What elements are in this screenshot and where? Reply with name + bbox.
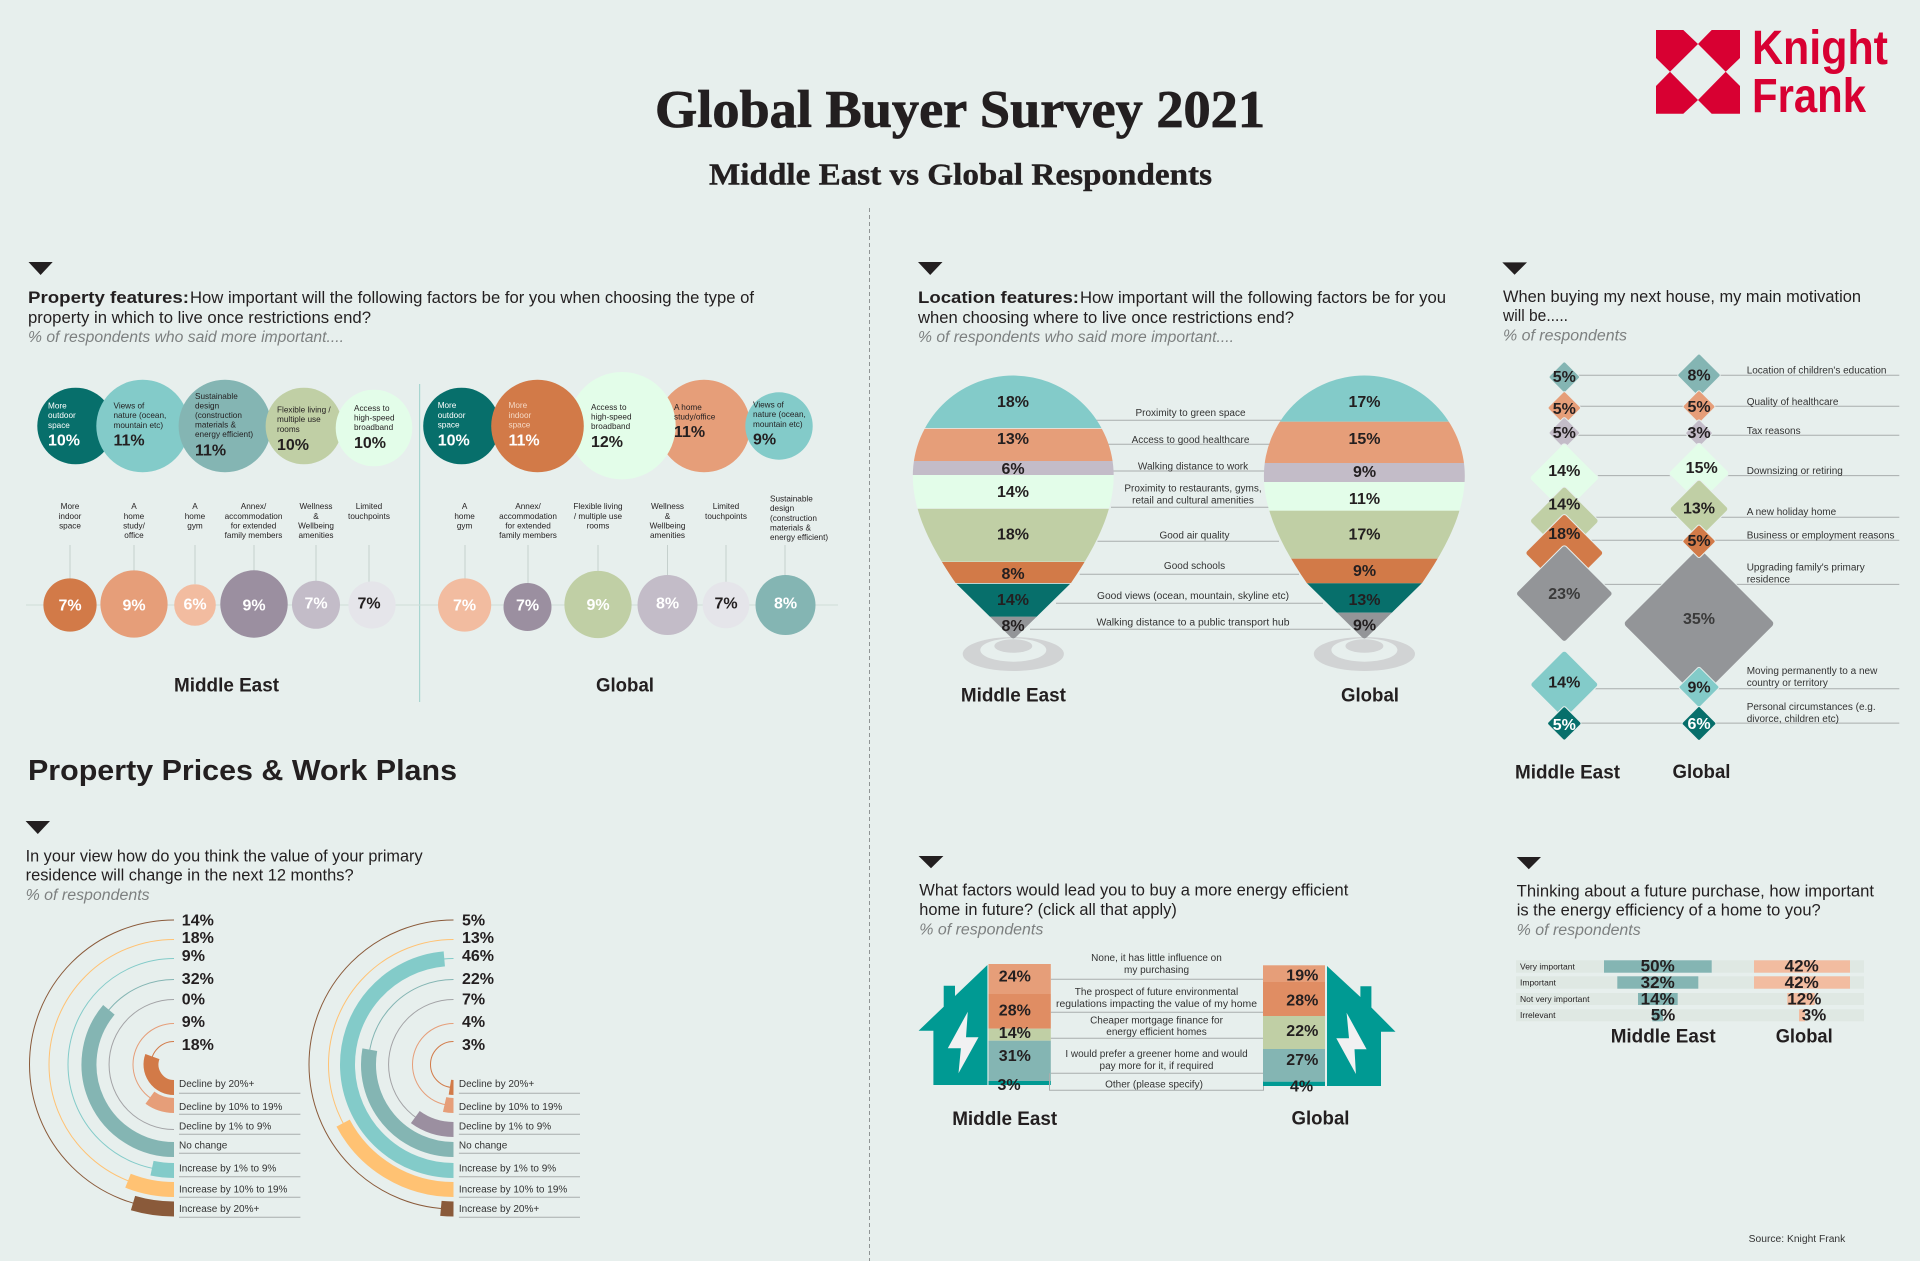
motivation labels: Personal circumstances (e.g.: [1747, 702, 1876, 713]
chart: Global more important: 9%: [753, 432, 776, 448]
chart: Middle East pin: 13%: [997, 431, 1029, 448]
chart: Global less important: 7%: [516, 598, 539, 614]
chart: Global less important: [438, 494, 828, 638]
chart: Middle East more important: nature (ocean,: [114, 411, 166, 420]
heading: location features: % of respondents who said more important....: [918, 329, 1234, 346]
chart: Middle East more important: 10%: [354, 435, 386, 452]
heading: property features: % of respondents who said more important....: [28, 329, 344, 346]
chart: Middle East pin: 18%: [997, 526, 1029, 544]
chart: Middle East less important: Annex/: [241, 502, 267, 511]
factor labels: None, it has little influence on: [1091, 953, 1222, 964]
chart: Middle East pin: 14%: [997, 484, 1029, 501]
chart: Global more important: nature (ocean,: [753, 410, 806, 419]
chart: Global less important: 7%: [714, 596, 738, 612]
chart: Middle East less important: Wellness: [299, 502, 333, 511]
chart: Global more important: Views of: [753, 400, 785, 410]
chart: importance bars: 12%: [1787, 990, 1821, 1008]
chart: Global pin: 11%: [1349, 491, 1380, 508]
chart: importance bars: 42%: [1785, 973, 1819, 992]
chart: Middle East more important: 10%: [277, 437, 309, 454]
chart: Global more important: mountain etc): [753, 420, 803, 429]
chart: Middle East less important: study/: [123, 522, 146, 530]
factor labels: pay more for it, if required: [1100, 1061, 1213, 1072]
label: Middle East: Middle East: [1515, 762, 1621, 784]
chart: Global stacked bar: 4%: [1290, 1078, 1313, 1096]
panel: energy efficient home factors: [919, 856, 1396, 1130]
chart: Middle East less important: 9%: [122, 598, 146, 614]
heading: main motivation: % of respondents: [1503, 327, 1627, 344]
icon: right house with lightning: [1327, 966, 1396, 1086]
chart: Middle East more important: materials &: [195, 420, 236, 430]
icon: section marker: [26, 821, 50, 834]
chart: Middle East diamonds: 23%: [1548, 586, 1580, 603]
motivation labels: Business or employment reasons: [1747, 530, 1895, 541]
label: Global: Global: [1776, 1026, 1833, 1048]
chart: Middle East more important: (construction: [195, 411, 242, 420]
chart: Global less important: Wellbeing: [650, 522, 686, 530]
chart: importance bars: Irrelevant: [1520, 1010, 1556, 1020]
heading: property features: property in which to live once restrictions end?: [28, 309, 371, 327]
chart: Global radial: 22%: [462, 971, 494, 988]
chart: importance bars: 5%: [1651, 1006, 1675, 1024]
chart: Global radial: [309, 912, 580, 1217]
chart: Middle East more important: Access to: [354, 404, 390, 413]
chart: Global less important: 9%: [586, 597, 610, 614]
panel: importance of energy efficiency: [1516, 857, 1874, 1048]
connector lines and factor labels: Access to good healthcare: [1132, 435, 1250, 446]
chart: Middle East radial: Decline by 20%+: [179, 1079, 254, 1090]
chart: Global more important: Access to: [591, 403, 627, 412]
chart: Global less important: Sustainable: [770, 494, 813, 504]
chart: Global diamonds: 5%: [1687, 399, 1711, 416]
chart: Middle East less important: for extended: [231, 522, 277, 530]
heading: property features: Property features:: [28, 289, 189, 307]
panel: location features: [905, 262, 1475, 706]
chart: Middle East less important: space: [59, 522, 81, 530]
motivation labels: residence: [1747, 575, 1790, 586]
chart: Middle East more important: Sustainable: [195, 392, 238, 401]
chart: Global diamonds: 13%: [1683, 500, 1715, 517]
chart: Global radial: No change: [459, 1140, 508, 1152]
connector lines and factor labels: Proximity to green space: [1135, 408, 1246, 419]
chart: Global radial: 46%: [462, 948, 494, 965]
chart: Middle East stacked bar: 3%: [998, 1077, 1021, 1094]
section heading: property prices and work plans: Property Prices & Work Plans: [28, 755, 457, 787]
chart: Middle East diamonds: 5%: [1553, 425, 1576, 442]
chart: Global less important: home: [454, 512, 475, 521]
chart: Global less important: / multiple use: [574, 512, 623, 521]
chart: Middle East more important: mountain etc): [114, 421, 163, 430]
chart: Global stacked bar: 22%: [1286, 1023, 1318, 1040]
chart: Global radial: 5%: [462, 912, 485, 930]
label: Middle East: Middle East: [1611, 1026, 1716, 1048]
factor labels: The prospect of future environmental: [1075, 987, 1238, 998]
chart: Middle East radial: 32%: [182, 971, 214, 988]
chart: Middle East less important: gym: [187, 522, 203, 530]
chart: Middle East radial: 14%: [182, 912, 214, 930]
chart: Global less important: accommodation: [499, 512, 557, 521]
motivation labels: Quality of healthcare: [1747, 397, 1839, 408]
chart: Global stacked bar: [1263, 965, 1325, 1096]
chart: Global more important: [423, 372, 813, 479]
connector lines and factor labels: Good views (ocean, mountain, skyline etc): [1097, 591, 1289, 602]
motivation labels: Downsizing or retiring: [1747, 466, 1843, 477]
chart: Global stacked bar: 19%: [1286, 968, 1318, 984]
chart: Global pin: 17%: [1348, 526, 1381, 544]
chart: Middle East stacked bar: 24%: [999, 968, 1031, 986]
chart: importance bars: [1516, 956, 1864, 1024]
chart: Middle East less important: More: [61, 502, 80, 511]
icon: section marker: [1502, 262, 1527, 275]
connector lines and factor labels: Good air quality: [1159, 530, 1230, 542]
chart: Middle East more important: 11%: [114, 432, 145, 450]
chart: Global more important: More: [508, 401, 528, 410]
chart: Middle East more important: space: [48, 421, 70, 430]
heading: energy factors: home in future? (click all that apply): [919, 901, 1177, 919]
motivation labels: country or territory: [1747, 678, 1828, 689]
chart: Global radial: Increase by 10% to 19%: [459, 1184, 567, 1196]
label: Middle East: Middle East: [961, 686, 1067, 706]
heading: property features: How important will the following factors be for you when choosing the type of: [190, 289, 754, 307]
icon: section marker: [1517, 857, 1541, 869]
chart: Middle East stacked bar: [988, 964, 1051, 1094]
chart: Middle East less important: 7%: [304, 596, 328, 612]
label: Middle East: Middle East: [952, 1109, 1058, 1130]
chart: Middle East less important: Limited: [356, 502, 383, 511]
chart: Middle East less important: Wellbeing: [298, 522, 334, 530]
heading: location features: How important will the following factors be for you: [1080, 289, 1446, 307]
connector lines and factor labels: Proximity to restaurants, gyms,: [1124, 484, 1262, 494]
icon: section marker: [28, 262, 53, 275]
heading: energy factors: What factors would lead you to buy a more energy efficient: [919, 882, 1349, 900]
factor labels: regulations impacting the value of my home: [1056, 999, 1257, 1010]
chart: Global pin: [1255, 375, 1475, 671]
icon: section marker: [918, 262, 942, 275]
chart: Global pin: 9%: [1353, 563, 1376, 580]
motivation labels: Moving permanently to a new: [1747, 666, 1878, 677]
chart: Global less important: touchpoints: [705, 512, 747, 521]
chart: Middle East pin: 14%: [997, 592, 1029, 609]
icon: left house with lightning: [919, 965, 987, 1085]
chart: Middle East less important: home: [185, 512, 206, 521]
chart: Global more important: broadband: [591, 422, 631, 431]
chart: Middle East more important: Views of: [114, 402, 145, 410]
panel: property features: [26, 262, 838, 702]
chart: Global more important: 11%: [508, 432, 540, 450]
chart: importance bars: 42%: [1785, 956, 1819, 976]
chart: Middle East radial: [30, 912, 300, 1217]
motivation labels: divorce, children etc): [1747, 714, 1839, 725]
chart: importance bars: 14%: [1641, 990, 1675, 1008]
chart: importance bars: Very important: [1520, 961, 1575, 971]
chart: Middle East radial: Increase by 10% to 19%: [179, 1184, 288, 1196]
motivation labels: Location of children's education: [1747, 366, 1886, 377]
chart: Global less important: &: [665, 512, 671, 521]
chart: Global less important: materials &: [770, 524, 811, 532]
motivation labels: Upgrading family's primary: [1747, 563, 1865, 574]
chart: Global diamonds: [1623, 353, 1775, 741]
label: Middle East: Middle East: [174, 676, 280, 696]
connector lines and factor labels: retail and cultural amenities: [1132, 496, 1254, 506]
chart: Global radial: Increase by 20%+: [459, 1204, 539, 1215]
chart: Middle East stacked bar: 28%: [999, 1002, 1031, 1020]
chart: Global less important: (construction: [770, 514, 817, 523]
chart: Middle East more important: outdoor: [48, 411, 76, 420]
chart: Global more important: 12%: [591, 434, 623, 451]
chart: Middle East diamonds: 14%: [1548, 497, 1580, 514]
chart: Global diamonds: 8%: [1687, 368, 1711, 384]
chart: Global less important: gym: [457, 522, 473, 530]
heading: property features: [28, 289, 754, 346]
chart: Global diamonds: 3%: [1687, 425, 1711, 442]
chart: Middle East diamonds: 14%: [1548, 463, 1580, 480]
chart: Middle East more important: design: [195, 402, 220, 410]
chart: Global less important: amenities: [650, 531, 685, 540]
chart: Global pin: 9%: [1353, 618, 1376, 634]
icon: section marker: [919, 856, 943, 868]
chart: Global more important: space: [438, 420, 460, 430]
title: Global Buyer Survey 2021: [655, 81, 1265, 139]
chart: Middle East radial: 9%: [182, 948, 205, 965]
chart: Middle East radial: 18%: [182, 930, 214, 947]
chart: Middle East more important: broadband: [354, 423, 394, 432]
chart: Global diamonds: 9%: [1687, 680, 1711, 696]
chart: Middle East less important: touchpoints: [348, 512, 390, 521]
heading: location features: Location features:: [918, 289, 1079, 307]
chart: Middle East diamonds: 18%: [1548, 526, 1580, 543]
chart: Middle East pin: 8%: [1001, 566, 1025, 583]
chart: Middle East diamonds: 5%: [1553, 717, 1576, 734]
chart: Middle East radial: Decline by 10% to 19%: [179, 1102, 283, 1113]
chart: importance bars: 50%: [1641, 956, 1675, 976]
chart: Middle East more important: rooms: [277, 425, 300, 434]
chart: importance bars: 32%: [1641, 973, 1675, 992]
connector lines and factor labels: Walking distance to work: [1138, 462, 1249, 472]
chart: Global less important: Flexible living: [573, 502, 623, 511]
chart: Global more important: space: [508, 420, 531, 430]
chart: Global diamonds: 6%: [1687, 716, 1711, 733]
chart: Global diamonds: 5%: [1687, 533, 1711, 550]
chart: Global more important: More: [438, 401, 457, 410]
chart: Middle East more important: 11%: [195, 442, 226, 460]
logo: Knight Frank: [1656, 22, 1888, 123]
chart: Middle East less important: accommodation: [225, 512, 283, 521]
motivation labels: Tax reasons: [1747, 426, 1801, 437]
chart: Global less important: Limited: [713, 502, 740, 511]
heading: location features: [917, 289, 1446, 346]
heading: importance of energy efficiency: % of respondents: [1517, 922, 1641, 939]
connector lines and factor labels: [1030, 408, 1350, 629]
heading: value change: % of respondents: [26, 887, 150, 904]
chart: Global more important: 11%: [674, 424, 705, 441]
chart: Global pin: 9%: [1353, 464, 1376, 481]
logo: Knight Frank: Frank: [1752, 70, 1866, 123]
chart: Global less important: rooms: [587, 522, 609, 530]
heading: location features: when choosing where to live once restrictions end?: [917, 309, 1294, 327]
chart: Global more important: 10%: [438, 432, 470, 450]
chart: Middle East more important: More: [48, 402, 67, 410]
chart: Middle East less important: A: [131, 502, 137, 511]
chart: Global less important: A: [462, 502, 468, 511]
chart: Global less important: for extended: [505, 522, 551, 530]
chart: Global pin: 17%: [1348, 394, 1381, 411]
chart: Global pin: 15%: [1348, 431, 1381, 448]
chart: Global less important: Wellness: [651, 502, 684, 511]
chart: Middle East pin: 8%: [1001, 618, 1025, 635]
chart: Middle East less important: 7%: [357, 596, 381, 612]
chart: Middle East radial: 0%: [182, 992, 205, 1008]
chart: Global diamonds: 15%: [1686, 460, 1718, 477]
factor labels: energy efficient homes: [1106, 1027, 1207, 1038]
chart: Global stacked bar: 27%: [1286, 1052, 1318, 1069]
chart: Middle East more important: [37, 380, 412, 472]
chart: Global radial: Decline by 20%+: [459, 1079, 534, 1090]
chart: Middle East less important: family members: [225, 531, 282, 540]
chart: Middle East radial: 9%: [182, 1014, 205, 1031]
chart: Middle East pin: 6%: [1001, 461, 1025, 478]
label: Global: Global: [596, 676, 654, 696]
heading: importance of energy efficiency: Thinking about a future purchase, how important: [1517, 883, 1874, 901]
chart: Middle East radial: Decline by 1% to 9%: [179, 1122, 271, 1132]
connector lines and factor labels: Good schools: [1164, 561, 1225, 572]
motivation labels: A new holiday home: [1747, 507, 1837, 518]
chart: Global more important: A home: [674, 403, 702, 412]
chart: Global less important: design: [770, 504, 795, 513]
chart: Middle East diamonds: [1515, 361, 1613, 741]
chart: Middle East less important: home: [124, 512, 145, 521]
chart: Global more important: outdoor: [438, 411, 466, 420]
chart: Global less important: Annex/: [515, 502, 541, 511]
chart: Global radial: Increase by 1% to 9%: [459, 1164, 556, 1174]
chart: importance bars: 3%: [1802, 1006, 1826, 1024]
chart: importance bars: Important: [1520, 978, 1557, 988]
heading: importance of energy efficiency: [1517, 883, 1874, 939]
chart: Middle East less important: &: [313, 512, 319, 521]
heading: main motivation: [1502, 288, 1861, 344]
chart: Middle East pin: 18%: [997, 394, 1029, 411]
chart: Middle East radial: Increase by 1% to 9%: [179, 1164, 276, 1174]
heading: value change: In your view how do you think the value of your primary: [26, 848, 423, 866]
chart: Global radial: 3%: [462, 1037, 485, 1054]
chart: Global more important: study/office: [674, 412, 716, 422]
chart: Global radial: 7%: [462, 992, 485, 1008]
chart: Global more important: indoor: [508, 411, 532, 420]
chart: Global less important: 8%: [656, 596, 679, 612]
motivation labels: [1747, 366, 1895, 725]
chart: Middle East more important: energy efficient): [195, 430, 253, 439]
chart: Global less important: family members: [499, 531, 557, 540]
panel: main motivation: [1502, 262, 1899, 783]
chart: Middle East more important: high-speed: [354, 414, 395, 422]
chart: Middle East pin: [905, 375, 1125, 671]
factor labels: Cheaper mortgage finance for: [1090, 1016, 1224, 1026]
label: Global: Global: [1292, 1108, 1350, 1130]
chart: Middle East radial: No change: [179, 1140, 228, 1152]
chart: Middle East more important: multiple use: [277, 415, 321, 424]
subtitle: Middle East vs Global Respondents: [709, 156, 1212, 192]
chart: Middle East diamonds: 5%: [1553, 369, 1576, 386]
label: Global: Global: [1672, 762, 1730, 783]
label: Global: Global: [1341, 686, 1399, 706]
chart: Middle East less important: office: [124, 531, 144, 540]
chart: Global diamonds: 35%: [1683, 611, 1715, 628]
chart: Middle East radial: Increase by 20%+: [179, 1204, 259, 1215]
chart: Middle East stacked bar: 31%: [999, 1048, 1031, 1065]
chart: Global stacked bar: 28%: [1286, 992, 1318, 1010]
chart: Global radial: 4%: [462, 1014, 485, 1031]
chart: Middle East less important: [43, 502, 396, 638]
chart: Middle East less important: 6%: [183, 596, 207, 614]
chart: Middle East less important: 7%: [58, 598, 82, 614]
chart: Global more important: high-speed: [591, 412, 632, 422]
chart: Middle East less important: 9%: [242, 598, 266, 614]
chart: Global radial: Decline by 1% to 9%: [459, 1122, 551, 1132]
chart: Global radial: Decline by 10% to 19%: [459, 1102, 562, 1113]
heading: importance of energy efficiency: is the energy efficiency of a home to you?: [1517, 902, 1821, 920]
logo: Knight Frank: Knight: [1752, 22, 1888, 75]
chart: Middle East less important: amenities: [298, 531, 334, 540]
heading: main motivation: will be.....: [1502, 307, 1568, 325]
chart: Global radial: 13%: [462, 930, 494, 947]
chart: Middle East diamonds: 14%: [1548, 675, 1580, 692]
heading: energy factors: % of respondents: [919, 921, 1044, 938]
chart: Middle East less important: indoor: [59, 512, 82, 521]
source note: Source: Knight Frank: [1749, 1234, 1846, 1245]
chart: Global less important: 8%: [774, 596, 797, 612]
factor labels: my purchasing: [1124, 965, 1189, 976]
connector lines and factor labels: Walking distance to a public transport hub: [1096, 618, 1290, 628]
chart: Middle East more important: 10%: [48, 432, 80, 450]
factor labels: I would prefer a greener home and would: [1065, 1049, 1248, 1060]
heading: value change: residence will change in the next 12 months?: [26, 867, 354, 885]
heading: value change: [26, 848, 423, 904]
heading: main motivation: When buying my next house, my main motivation: [1503, 288, 1861, 306]
chart: Middle East more important: Flexible living /: [277, 406, 331, 414]
factor labels: [1050, 953, 1264, 1090]
chart: Middle East stacked bar: 14%: [999, 1025, 1031, 1042]
chart: importance bars: Not very important: [1520, 994, 1590, 1004]
chart: Middle East diamonds: 5%: [1553, 401, 1576, 418]
factor labels: Other (please specify): [1105, 1080, 1203, 1090]
panel: primary residence value change: [26, 821, 580, 1217]
chart: Global pin: 13%: [1348, 592, 1381, 609]
chart: Middle East less important: A: [192, 502, 198, 511]
chart: Global less important: 7%: [453, 598, 476, 614]
chart: Global less important: energy efficient): [770, 533, 828, 542]
heading: energy factors: [919, 882, 1349, 938]
chart: Middle East radial: 18%: [182, 1037, 214, 1054]
